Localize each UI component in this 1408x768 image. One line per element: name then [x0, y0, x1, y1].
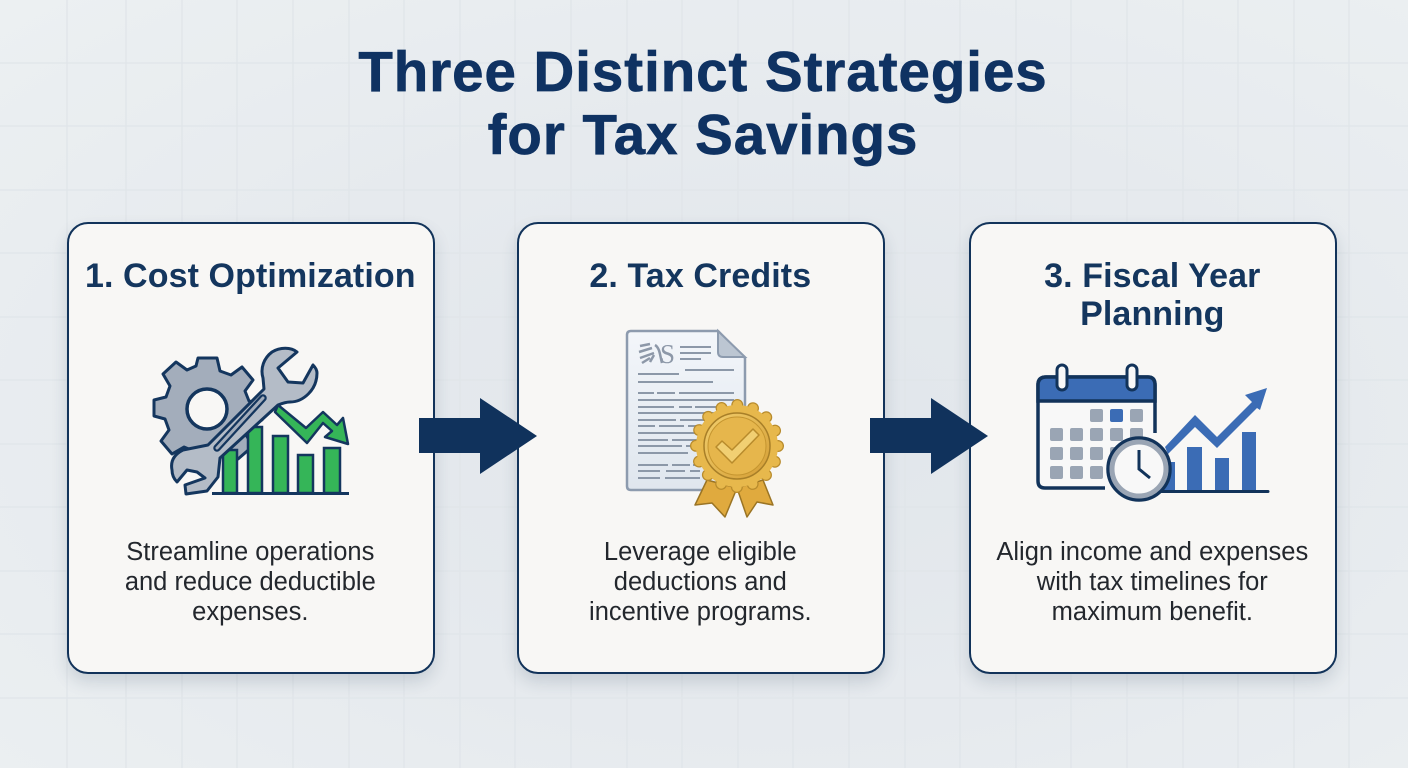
heading: fiscal year planning: 3. Fiscal Year — [1044, 257, 1260, 295]
text: cost optimization description: expenses. — [192, 598, 308, 626]
gold seal — [696, 405, 778, 487]
text: cost optimization description — [125, 538, 376, 626]
heading: tax credits: 2. Tax Credits — [589, 257, 811, 295]
document — [627, 331, 745, 490]
icon: calendar, clock and rising bar chart — [1036, 364, 1270, 502]
ribbons — [695, 480, 773, 517]
text: fiscal year planning description: with tax timelines for — [1037, 568, 1268, 596]
text: fiscal year planning description: maximum benefit. — [1052, 598, 1253, 626]
rising arrow — [1165, 388, 1267, 454]
green bars — [223, 427, 340, 493]
calendar — [1038, 365, 1155, 488]
document: S — [660, 339, 675, 369]
title — [358, 40, 1048, 166]
heading: cost optimization: 1. Cost Optimization — [85, 257, 416, 295]
gear — [154, 358, 262, 462]
title: Three Distinct Strategies — [358, 40, 1048, 103]
green falling arrow — [275, 405, 348, 444]
text: cost optimization description: Streamline operations — [126, 538, 374, 566]
text: tax credits description: Leverage eligible — [604, 538, 797, 566]
text: tax credits description — [589, 538, 812, 626]
text: tax credits description: deductions and — [614, 568, 787, 596]
arrow: step 1 to step 2 — [419, 398, 537, 474]
wrench — [172, 348, 317, 494]
text: fiscal year planning description — [996, 538, 1308, 626]
blue bars — [1160, 432, 1256, 491]
panel: cost optimization — [67, 222, 435, 674]
heading: fiscal year planning: Planning — [1080, 295, 1224, 333]
clock — [1108, 438, 1170, 500]
text: tax credits description: incentive programs. — [589, 598, 812, 626]
panel: tax credits — [517, 222, 885, 674]
text: fiscal year planning description: Align income and expenses — [996, 538, 1308, 566]
panel: fiscal year planning — [969, 222, 1337, 674]
text: cost optimization description: and reduce deductible — [125, 568, 376, 596]
heading: fiscal year planning — [1044, 257, 1260, 333]
icon: tax document with gold seal — [626, 328, 784, 518]
icon: gear, wrench and falling bar chart — [152, 346, 350, 496]
arrow: step 2 to step 3 — [870, 398, 988, 474]
title: for Tax Savings — [488, 103, 918, 166]
